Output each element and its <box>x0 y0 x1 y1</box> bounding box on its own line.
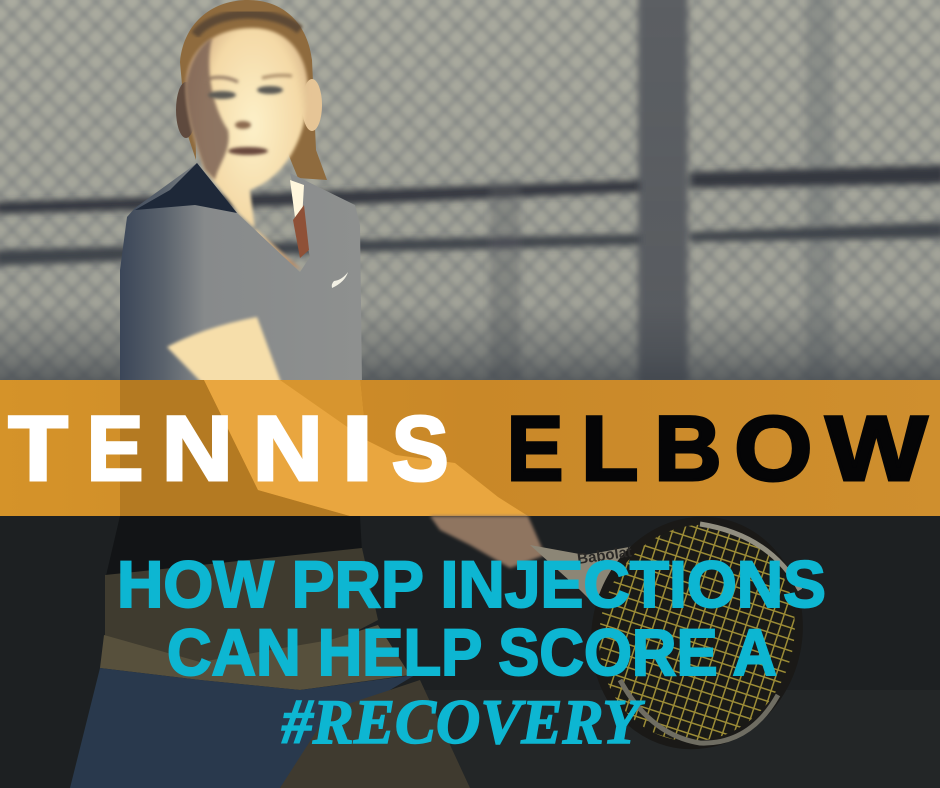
title: TENNIS: N <box>162 398 233 500</box>
subtitle line 1: HOW PRP INJECTIONS <box>117 547 826 621</box>
shirt logo <box>332 272 348 288</box>
player face and neck <box>186 28 308 270</box>
title: ELBOW: O <box>734 398 812 500</box>
racket brand text: Babolat <box>576 543 633 568</box>
title: ELBOW: L <box>581 398 638 500</box>
photo: tennis player upper body <box>120 0 362 385</box>
title: TENNIS: T <box>8 398 68 500</box>
title: TENNIS <box>8 398 449 500</box>
player eyes and mouth <box>204 75 292 155</box>
player shirt <box>120 163 362 385</box>
title: ELBOW <box>507 398 927 500</box>
title: TENNIS: E <box>87 398 143 500</box>
subtitle line 2: CAN HELP SCORE A <box>167 615 777 689</box>
orange title band <box>0 380 940 516</box>
title: TENNIS: N <box>253 398 323 500</box>
photo background: chain-link fence <box>0 0 940 385</box>
dark lower panel <box>0 498 940 788</box>
title: ELBOW: W <box>826 398 927 500</box>
player ears <box>176 82 196 138</box>
player hair <box>180 0 327 180</box>
player shorts and skirt <box>105 516 362 580</box>
hand and racket throat <box>430 516 545 568</box>
title: ELBOW: E <box>507 398 563 500</box>
tennis racket <box>530 517 803 750</box>
title: TENNIS: I <box>342 398 373 500</box>
player arm above band <box>167 317 282 385</box>
hashtag recovery: #RECOVERY <box>281 686 645 757</box>
title: ELBOW: B <box>654 398 722 500</box>
title: TENNIS: S <box>392 398 449 500</box>
